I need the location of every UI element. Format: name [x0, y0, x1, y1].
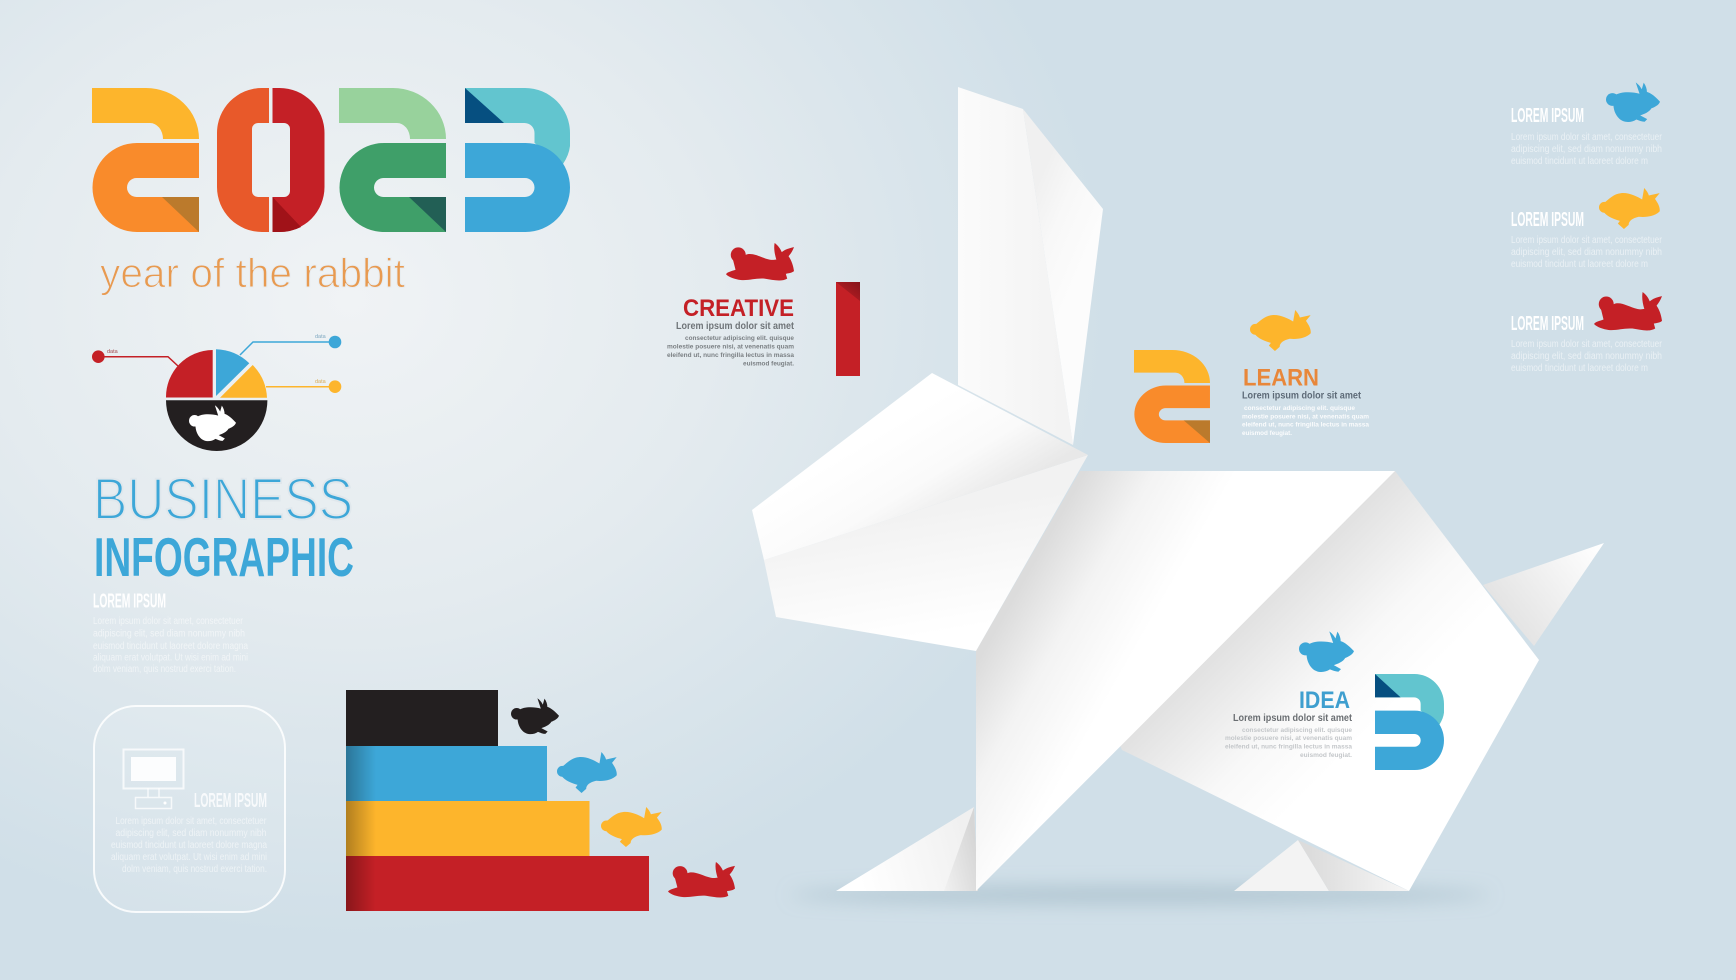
section 2: learn	[1134, 310, 1369, 443]
subheading: Lorem ipsum dolor sit amet	[1233, 713, 1353, 724]
right column item: red rabbit: adipiscing elit, sed diam nonummy nibh	[1511, 351, 1662, 362]
intro text block: Lorem ipsum dolor sit amet, consectetuer	[93, 616, 244, 627]
right column item: yellow rabbit	[1511, 188, 1663, 270]
right column item: blue rabbit	[1511, 82, 1663, 167]
subheading: Lorem ipsum dolor sit amet	[1242, 390, 1362, 402]
ear	[958, 87, 1103, 445]
INFOGRAPHIC: INFOGRAPHIC	[94, 526, 354, 588]
icon: white rabbit	[189, 405, 236, 441]
right column item: yellow rabbit: adipiscing elit, sed diam nonummy nibh	[1511, 247, 1662, 258]
icon: red rabbit	[1594, 292, 1662, 330]
intro text block	[93, 590, 248, 675]
bar fold shading	[346, 746, 376, 911]
right column item: yellow rabbit: Lorem ipsum dolor sit amet, consectetuer	[1511, 235, 1663, 246]
intro text block: LOREM IPSUM	[93, 590, 166, 612]
bar blue	[346, 746, 547, 801]
card heading: LOREM IPSUM	[194, 790, 267, 812]
icon: yellow rabbit	[601, 807, 662, 847]
head lower	[764, 455, 1088, 651]
card body text: euismod tincidunt ut laoreet dolore magna	[111, 840, 267, 851]
icon: red rabbit	[726, 243, 794, 280]
body text: consectetur adipiscing elit. quisque	[685, 335, 794, 342]
card body text: Lorem ipsum dolor sit amet, consectetuer	[116, 816, 267, 827]
icon: black rabbit	[511, 698, 559, 734]
digit 2	[92, 88, 199, 232]
body text: molestie posuere nisi, at venenatis quam	[1225, 735, 1352, 742]
body text: eleifend ut, nunc fringilla lectus in massa	[1225, 744, 1352, 750]
data labels	[107, 334, 327, 385]
bar red	[346, 856, 649, 911]
head upper	[752, 373, 1088, 560]
intro text block: dolm veniam, quis nostrud exerci tation.	[93, 664, 236, 675]
body text: euismod feugiat.	[1300, 752, 1352, 759]
body text: eleifend ut, nunc fringilla lectus in massa	[1242, 422, 1369, 428]
pie slice red	[166, 350, 213, 398]
heading: IDEA	[1299, 687, 1350, 714]
data labels: data	[107, 349, 119, 355]
right column item: red rabbit: Lorem ipsum dolor sit amet, consectetuer	[1511, 339, 1663, 350]
body text: consectetur adipiscing elit. quisque	[1244, 405, 1355, 412]
bar black	[346, 690, 498, 746]
title: business infographic	[93, 467, 354, 588]
intro text block: euismod tincidunt ut laoreet dolore magna	[93, 641, 248, 652]
right column item: blue rabbit: adipiscing elit, sed diam nonummy nibh	[1511, 144, 1662, 155]
digit 0	[217, 88, 324, 232]
intro text block: adipiscing elit, sed diam nonummy nibh	[93, 629, 245, 640]
icon: computer	[124, 750, 184, 808]
rear body	[1100, 471, 1539, 891]
right column item: red rabbit: euismod tincidunt ut laoreet dolore m	[1511, 363, 1648, 374]
icon: yellow rabbit	[1599, 188, 1660, 229]
body text: eleifend ut, nunc fringilla lectus in massa	[667, 352, 794, 359]
subtitle: year of the rabbit: year of the rabbit	[100, 250, 406, 296]
section 1: creative	[667, 243, 860, 376]
right column item: yellow rabbit: LOREM IPSUM	[1511, 209, 1584, 231]
heading: 2023 numerals	[92, 88, 570, 232]
section 3: idea	[1225, 631, 1444, 770]
body text	[667, 335, 794, 368]
intro text block: aliquam erat volutpat. Ut wisi enim ad mini	[93, 653, 248, 664]
data labels: data	[315, 379, 327, 385]
card outline	[94, 706, 285, 912]
numeral 2	[1134, 350, 1210, 443]
icon: blue rabbit	[1606, 82, 1660, 122]
front foot	[836, 807, 978, 891]
callout lines	[98, 342, 335, 387]
front body	[976, 471, 1395, 891]
body text	[1225, 727, 1352, 759]
icon: yellow rabbit	[1250, 310, 1311, 351]
card body text: aliquam erat volutpat. Ut wisi enim ad mini	[111, 852, 267, 863]
icon: red rabbit	[668, 862, 735, 898]
pie chart with data callouts	[92, 334, 341, 451]
body text	[1242, 405, 1369, 437]
body text: euismod feugiat.	[1242, 430, 1292, 437]
bar yellow	[346, 801, 590, 856]
data labels: data	[315, 334, 327, 340]
rear foot	[1234, 840, 1409, 891]
BUSINESS: BUSINESS	[93, 467, 353, 532]
card body text: adipiscing elit, sed diam nonummy nibh	[116, 828, 266, 839]
body text: consectetur adipiscing elit. quisque	[1242, 727, 1352, 734]
body text: euismod feugiat.	[743, 360, 794, 368]
heading: CREATIVE	[683, 295, 794, 322]
subheading: Lorem ipsum dolor sit amet	[676, 321, 795, 332]
right column item: blue rabbit: euismod tincidunt ut laoreet dolore m	[1511, 156, 1648, 167]
heading: LEARN	[1243, 364, 1319, 392]
icon: blue rabbit	[1299, 631, 1354, 672]
card body text: dolm veniam, quis nostrud exerci tation.	[122, 864, 267, 875]
tail	[1483, 543, 1604, 646]
pie lower half black	[166, 400, 267, 451]
digit 3	[465, 88, 570, 232]
origami rabbit floor shadow	[790, 886, 1490, 904]
callout dots	[92, 336, 341, 393]
pie slice yellow	[220, 365, 267, 398]
stair bar chart	[346, 690, 735, 911]
pie slice blue	[216, 349, 249, 396]
body text: molestie posuere nisi, at venenatis quam	[1242, 414, 1369, 420]
right column item: blue rabbit: LOREM IPSUM	[1511, 105, 1584, 127]
right column item: red rabbit	[1511, 292, 1663, 374]
icon: blue rabbit	[557, 752, 617, 793]
numeral 1	[836, 282, 860, 376]
right column item: red rabbit: LOREM IPSUM	[1511, 313, 1584, 335]
panel: rounded computer card	[94, 706, 285, 912]
right column item: yellow rabbit: euismod tincidunt ut laoreet dolore m	[1511, 259, 1648, 270]
right column item: blue rabbit: Lorem ipsum dolor sit amet, consectetuer	[1511, 132, 1663, 143]
origami rabbit	[752, 87, 1604, 891]
digit 2 green	[339, 88, 446, 232]
card body text	[111, 816, 267, 875]
body text: molestie posuere nisi, at venenatis quam	[667, 344, 794, 350]
numeral 3	[1375, 674, 1444, 770]
